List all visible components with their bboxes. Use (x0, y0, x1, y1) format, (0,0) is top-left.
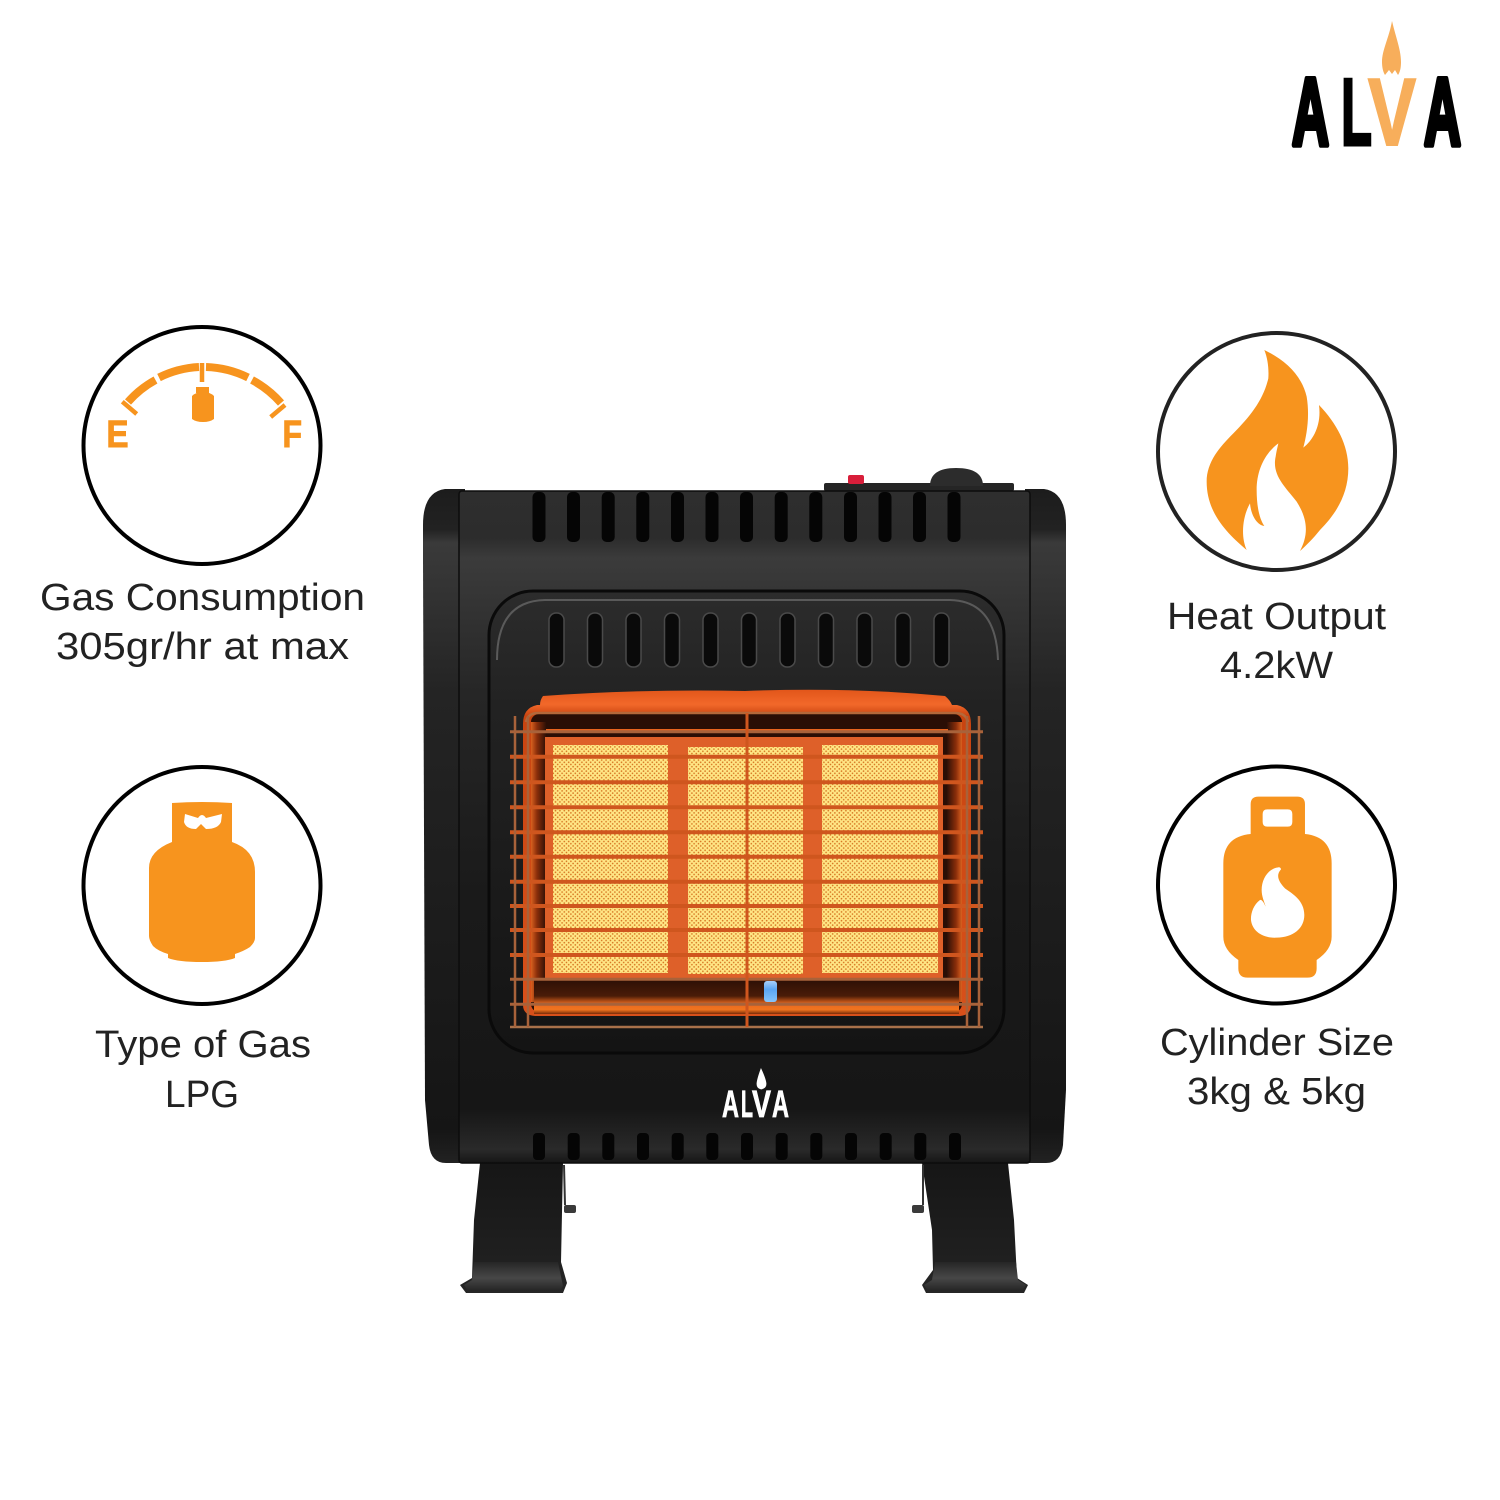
icon: fuel gauge (106, 363, 302, 456)
top inner band (546, 729, 948, 732)
logo flame (1382, 21, 1401, 75)
glowing hood (523, 690, 971, 1016)
label: 4.2kW (1220, 645, 1333, 687)
panel: heat output (1158, 333, 1395, 687)
burner (510, 690, 983, 1027)
left side panel (423, 489, 465, 1163)
control strip (824, 468, 1014, 491)
dial knob (930, 468, 983, 486)
bottom vents (533, 1133, 961, 1160)
label: 3kg & 5kg (1187, 1071, 1366, 1113)
blue pilot flame (764, 981, 777, 1002)
icon: cylinder with flame (1223, 797, 1332, 978)
icon: flame (1207, 350, 1348, 551)
main front panel (459, 491, 1030, 1163)
left glow column (531, 722, 546, 1002)
circle outline (1158, 766, 1395, 1004)
heater logo wordmark: V (752, 1084, 771, 1126)
circle outline (84, 767, 320, 1004)
logo wordmark: A (1292, 59, 1329, 166)
right leg (912, 1163, 1028, 1293)
heater logo wordmark: A (772, 1084, 789, 1126)
logo wordmark: A (1424, 59, 1461, 166)
icon: fuel gauge: E (106, 414, 128, 456)
ceramic surround (545, 737, 943, 978)
ceramic panels (553, 745, 938, 974)
dark interior (531, 714, 962, 1012)
label: Type of Gas (95, 1024, 311, 1066)
icon: fuel gauge: F (282, 414, 302, 456)
panel: cylinder size (1158, 766, 1395, 1113)
gas heater product (423, 468, 1066, 1293)
guard wires (510, 713, 983, 1027)
left leg (460, 1163, 576, 1293)
logo wordmark: L (1341, 59, 1372, 166)
label: LPG (165, 1074, 239, 1116)
brand logo (1292, 21, 1461, 166)
inner vents (549, 613, 949, 667)
panel: type of gas (84, 767, 320, 1116)
logo wordmark: V (1368, 59, 1416, 166)
top vents (532, 492, 960, 542)
circle outline (84, 327, 320, 564)
label: Gas Consumption (40, 577, 365, 619)
right side panel (1025, 489, 1066, 1163)
lower burner glow (534, 978, 959, 1014)
panel: gas consumption (40, 327, 365, 668)
heater logo (722, 1069, 789, 1126)
circle outline (1158, 333, 1395, 570)
red button (848, 475, 864, 484)
window frame (489, 591, 1004, 1053)
label: Cylinder Size (1160, 1022, 1394, 1064)
label: 305gr/hr at max (56, 626, 349, 668)
heater logo wordmark: A (722, 1084, 739, 1126)
heater logo wordmark: L (741, 1084, 753, 1126)
window highlight (497, 600, 998, 660)
guard top rim (526, 713, 968, 722)
label: Heat Output (1167, 596, 1386, 638)
icon: LPG cylinder (149, 802, 255, 962)
right glow column (947, 722, 962, 1002)
heater logo flame (757, 1069, 766, 1089)
